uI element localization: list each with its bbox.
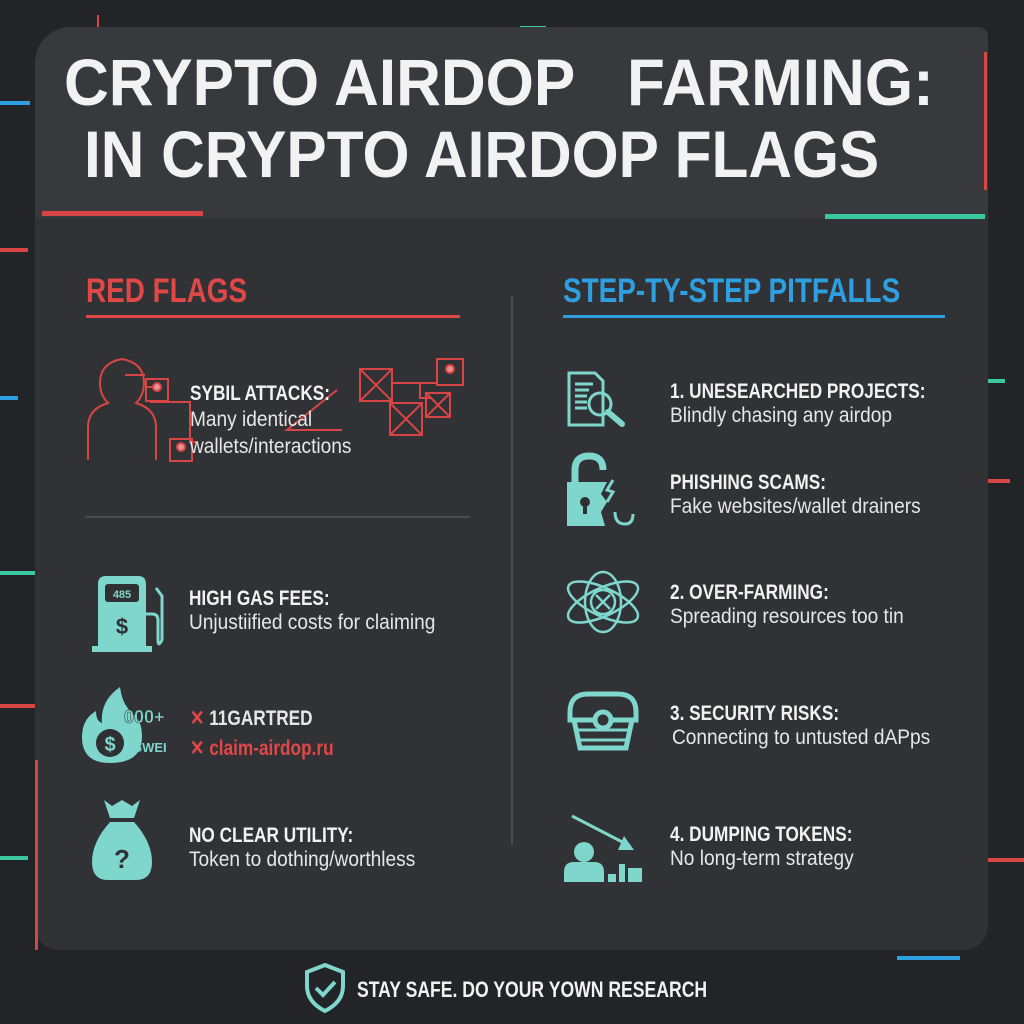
- heading: step pitfalls: STEP-TY-STEP PITFALLS: [563, 272, 900, 310]
- icon: fire gwei: GWEI: [132, 740, 167, 755]
- text: unresearched: [670, 380, 925, 427]
- text: scam list: ✕ 11GARTRED: [190, 707, 313, 730]
- text: sybil: SYBIL ATTACKS:: [190, 382, 330, 405]
- footer: stay safe: STAY SAFE. DO YOUR YOWN RESEARCH: [357, 977, 707, 1002]
- text: unresearched: Blindly chasing any airdop: [670, 404, 892, 427]
- text: gas fees: [189, 587, 435, 634]
- text: gas fees: Unjustiified costs for claiming: [189, 611, 435, 634]
- text: sybil: [190, 382, 351, 458]
- text: phishing: Fake websites/wallet drainers: [670, 495, 921, 518]
- icon: fire gwei: [82, 687, 167, 763]
- icon: fire gwei: $: [104, 734, 116, 756]
- text: phishing: PHISHING SCAMS:: [670, 471, 826, 494]
- heading: red flags: [86, 272, 460, 318]
- text: over-farming: 2. OVER-FARMING:: [670, 581, 829, 604]
- icon: gas pump: [92, 576, 164, 652]
- icon: document search: [568, 372, 625, 427]
- text: over-farming: [670, 581, 904, 628]
- icon: orbit over-farming: [566, 570, 640, 634]
- text: phishing: [670, 471, 921, 518]
- text: security: 3. SECURITY RISKS:: [670, 702, 839, 725]
- icon: shield: [305, 962, 345, 1014]
- text: no utility: Token to dothing/worthless: [189, 848, 415, 871]
- icon: chest: [568, 692, 638, 750]
- icon: gas pump: $: [116, 614, 128, 639]
- icon: sybil hacker network: [87, 358, 464, 462]
- text: unresearched: 1. UNESEARCHED PROJECTS:: [670, 380, 925, 403]
- icon: fire gwei: 000+: [124, 707, 165, 727]
- text: over-farming: Spreading resources too tin: [670, 605, 904, 628]
- text: scam list: [190, 707, 334, 760]
- icon: dumping: [564, 814, 642, 882]
- text: sybil: Many identical: [190, 408, 312, 431]
- title: [64, 45, 934, 191]
- text: no utility: NO CLEAR UTILITY:: [189, 824, 353, 847]
- text: dumping: 4. DUMPING TOKENS:: [670, 823, 852, 846]
- icon: gas pump: 485: [113, 589, 131, 601]
- text: security: [670, 702, 930, 749]
- footer: stay safe: [305, 962, 707, 1014]
- heading: red flags: RED FLAGS: [86, 272, 247, 310]
- title: CRYPTO AIRDOP FARMING:: [64, 45, 934, 119]
- icon: money bag: ?: [114, 844, 130, 874]
- text: dumping: [670, 823, 854, 870]
- title: IN CRYPTO AIRDOP FLAGS: [84, 117, 879, 191]
- icon: money bag: [92, 800, 152, 880]
- text: dumping: No long-term strategy: [670, 847, 854, 870]
- icon: broken lock hook: [567, 452, 634, 526]
- text: security: Connecting to untusted dAPps: [672, 726, 930, 749]
- text: no utility: [189, 824, 415, 871]
- text: sybil: wallets/interactions: [190, 435, 351, 458]
- text: gas fees: HIGH GAS FEES:: [189, 587, 330, 610]
- text: scam list: ✕ claim-airdop.ru: [190, 737, 334, 760]
